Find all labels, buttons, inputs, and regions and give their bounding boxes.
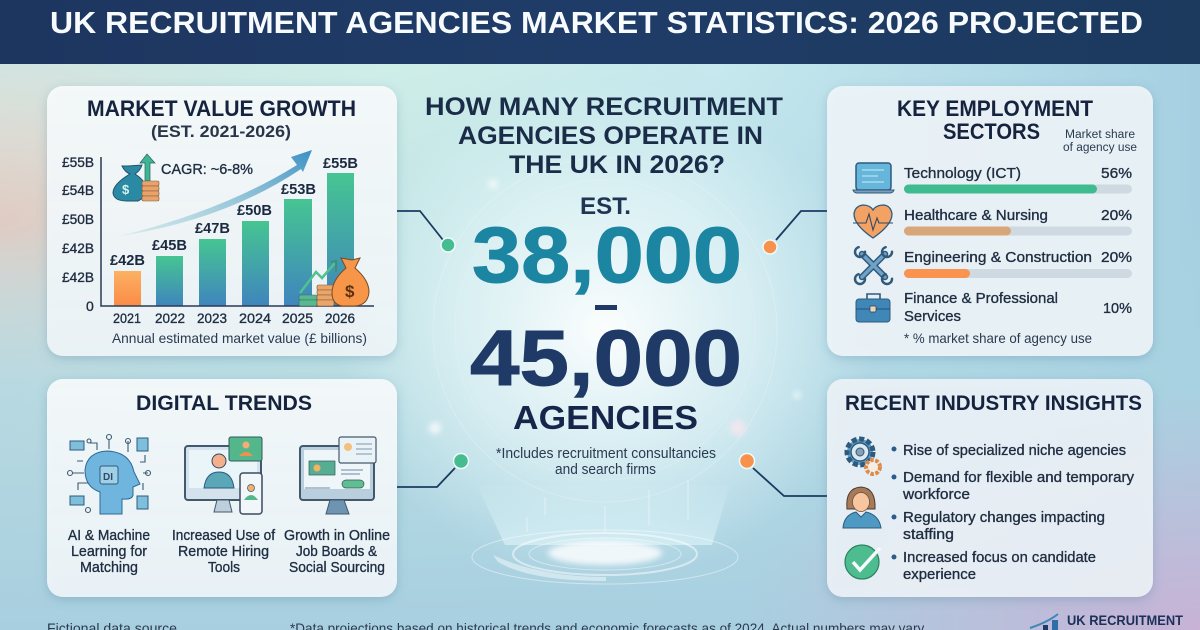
central glow and holographic rings [335, 80, 875, 580]
footnote: * % market share of agency use [904, 330, 1092, 346]
trend labels: Remote Hiring [178, 543, 269, 560]
bar value labels: £45B [152, 237, 187, 254]
bar value labels [110, 155, 358, 269]
sector: engineering [855, 247, 1132, 284]
bar value labels: £50B [237, 202, 272, 219]
sector: finance: Services [904, 308, 961, 325]
heading: (EST. 2021-2026) [151, 122, 291, 141]
trend labels: Social Sourcing [289, 559, 385, 576]
sector: healthcare: Healthcare & Nursing [904, 207, 1048, 224]
panel: recent industry insights [827, 379, 1153, 597]
includes note: *Includes recruitment consultancies [496, 446, 716, 462]
bullet list [892, 442, 1134, 583]
heading: SECTORS [943, 119, 1040, 144]
y axis labels [62, 154, 94, 314]
icon: online job boards [300, 437, 376, 514]
heading: RECENT INDUSTRY INSIGHTS [845, 391, 1142, 415]
caption: Annual estimated market value (£ billions) [112, 330, 367, 346]
icon: coins, growth arrow and money bag: $ [345, 282, 355, 301]
icon: money bag with arrow [113, 154, 159, 201]
trend labels: AI & Machine [68, 527, 150, 544]
bullet list: experience [903, 566, 976, 583]
sector: technology: 56% [1101, 165, 1132, 182]
bullet list: workforce [902, 486, 970, 503]
icon: person [843, 487, 881, 528]
bar value labels: £53B [281, 181, 316, 198]
heading [87, 96, 356, 141]
trend labels: Learning for [71, 543, 147, 560]
x axis labels: 2025 [282, 310, 313, 326]
y axis labels: £55B [62, 154, 94, 170]
y axis labels: £42B [62, 240, 94, 256]
panel: market value growth [47, 86, 397, 356]
sector: technology: Technology (ICT) [904, 165, 1021, 182]
bullet list: staffing [903, 526, 954, 543]
icon: laptop [853, 163, 894, 193]
heading: DIGITAL TRENDS [136, 391, 312, 415]
legend note [1063, 129, 1137, 154]
trend labels: Matching [80, 559, 138, 576]
icon: remote hiring [185, 437, 262, 514]
trend labels [68, 527, 390, 576]
est label: EST. [580, 193, 631, 220]
icon: heart with pulse [853, 205, 893, 238]
x axis labels: 2021 [113, 310, 141, 326]
panel: key employment sectors [827, 86, 1153, 356]
sector: finance: Finance & Professional [904, 290, 1058, 307]
trend labels: Increased Use of [172, 527, 276, 544]
sector: technology [853, 163, 1132, 194]
x axis labels: 2022 [155, 310, 185, 326]
heading: KEY EMPLOYMENT [897, 96, 1094, 121]
question heading: AGENCIES OPERATE IN [458, 122, 763, 150]
bar value labels: £42B [110, 252, 145, 269]
growth arrow [120, 150, 312, 236]
legend note: of agency use [1063, 142, 1137, 154]
header band [0, 0, 1200, 64]
holographic platform [472, 480, 738, 584]
includes note [496, 446, 716, 478]
x axis labels: 2026 [325, 310, 355, 326]
icon: coins, growth arrow and money bag [299, 258, 369, 306]
panel: digital trends [47, 379, 397, 597]
bullet list: Rise of specialized niche agencies [903, 442, 1126, 459]
bar chart [62, 154, 374, 346]
big number: 45,000: 45,000 [470, 313, 742, 402]
agencies label: AGENCIES [513, 399, 698, 436]
bars [114, 173, 354, 306]
icon: crossed spanners [855, 247, 892, 284]
bar value labels: £55B [323, 155, 358, 172]
y axis labels: 0 [86, 298, 94, 314]
footer logo: UK RECRUITMENT [1067, 612, 1183, 628]
trend labels: Growth in Online [284, 527, 390, 544]
icon: AI head: DI [103, 472, 113, 483]
bullet list: Increased focus on candidate [903, 549, 1096, 566]
legend note: Market share [1065, 129, 1135, 141]
sector: finance: 10% [1103, 300, 1132, 317]
trend labels: Job Boards & [296, 543, 377, 560]
cagr label: CAGR: ~6-8% [161, 161, 253, 178]
icon: check badge [845, 545, 880, 579]
icon: briefcase [856, 294, 890, 322]
connector lines and nodes [397, 211, 827, 496]
y axis labels: £50B [62, 211, 94, 227]
sector: finance [856, 290, 1132, 325]
title: UK RECRUITMENT AGENCIES MARKET STATISTICS: 2026 PROJECTED [50, 5, 1143, 40]
sector: engineering: 20% [1101, 249, 1132, 266]
x axis labels: 2023 [197, 310, 227, 326]
central headline block [425, 93, 783, 478]
sector: healthcare [853, 205, 1132, 238]
x axis labels [113, 310, 355, 326]
bullet list: Demand for flexible and temporary [903, 469, 1134, 486]
bullet list: Regulatory changes impacting [903, 509, 1105, 526]
sector: engineering: Engineering & Construction [904, 249, 1092, 266]
includes note: and search firms [555, 462, 656, 478]
sector: healthcare: 20% [1101, 207, 1132, 224]
x axis labels: 2024 [239, 310, 271, 326]
footer logo [1030, 612, 1183, 630]
heading [897, 96, 1094, 144]
dash [595, 305, 617, 310]
icon: money bag with arrow: $ [122, 182, 130, 197]
heading: MARKET VALUE GROWTH [87, 96, 356, 121]
big number: 38,000: 38,000 [472, 210, 742, 299]
icon: gears [847, 439, 880, 474]
y axis labels: £42B [62, 269, 94, 285]
question heading [425, 93, 783, 179]
question heading: HOW MANY RECRUITMENT [425, 93, 783, 121]
trend labels: Tools [208, 559, 240, 576]
y axis labels: £54B [62, 182, 94, 198]
question heading: THE UK IN 2026? [509, 151, 725, 179]
bar value labels: £47B [195, 220, 230, 237]
icon: AI head [68, 434, 150, 514]
